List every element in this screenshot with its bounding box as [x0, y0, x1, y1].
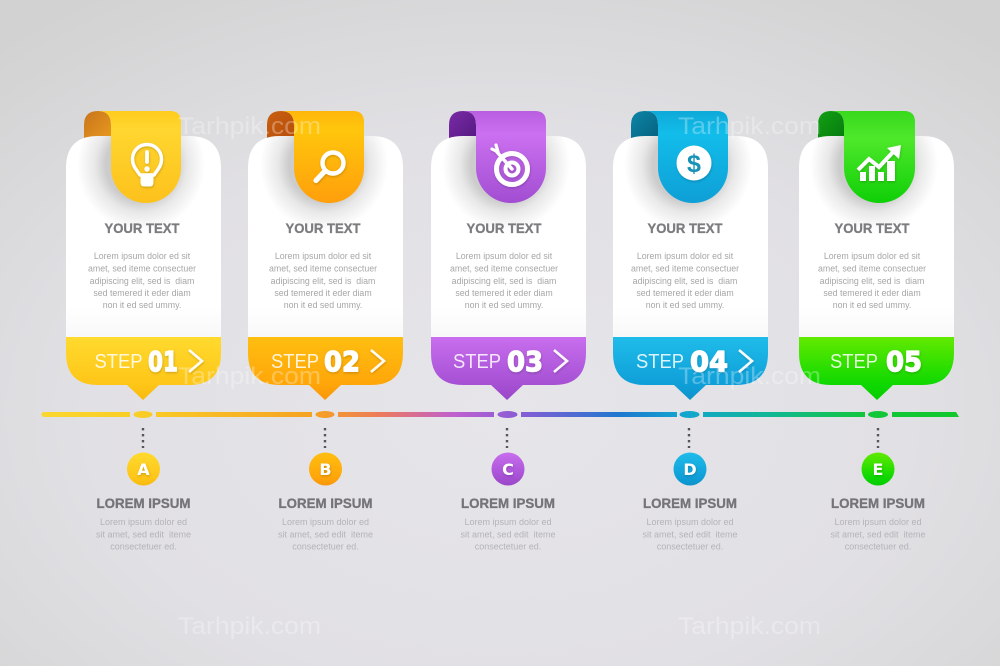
step band — [613, 337, 768, 400]
watermarks: Tarhpik.com — [678, 613, 821, 640]
description — [269, 251, 377, 310]
description: Lorem ipsum dolor ed — [100, 517, 187, 527]
ribbon shadow — [266, 136, 382, 224]
description: sed temered it eder diam — [823, 288, 921, 298]
description: sed temered it eder diam — [636, 288, 734, 298]
step label: STEP — [453, 350, 501, 373]
description: adipiscing elit, sed is diam — [271, 276, 375, 286]
ribbon — [463, 111, 546, 203]
step label — [830, 345, 922, 378]
badge D: D — [683, 460, 697, 479]
badge E: E — [873, 460, 883, 479]
description: sed temered it eder diam — [455, 288, 553, 298]
description: non it ed sed ummy. — [103, 300, 181, 310]
description: non it ed sed ummy. — [284, 300, 362, 310]
step label: 05 — [886, 345, 922, 378]
description: Lorem ipsum dolor ed sit — [824, 251, 921, 261]
description: Lorem ipsum dolor ed sit — [637, 251, 734, 261]
description: adipiscing elit, sed is diam — [820, 276, 924, 286]
description: Lorem ipsum dolor ed — [646, 517, 734, 527]
card body — [431, 136, 586, 337]
description: sit amet, sed edit iteme — [460, 530, 556, 540]
arrow — [554, 350, 567, 372]
connector — [506, 428, 508, 448]
description: adipiscing elit, sed is diam — [90, 276, 194, 286]
description — [460, 517, 556, 552]
milestone C — [460, 428, 556, 552]
arrow — [189, 350, 202, 372]
panel: step 02 — [248, 99, 403, 400]
description: non it ed sed ummy. — [833, 300, 911, 310]
connector — [324, 428, 326, 448]
step label — [94, 345, 178, 378]
step label — [271, 345, 360, 378]
step band — [66, 337, 221, 400]
step band — [431, 337, 586, 400]
step label — [636, 345, 728, 378]
description: sed temered it eder diam — [274, 288, 372, 298]
description: Lorem ipsum dolor ed sit — [275, 251, 372, 261]
connector — [688, 428, 690, 448]
icon: growth chart — [858, 145, 901, 181]
watermarks: Tarhpik.com — [178, 113, 321, 140]
description: Lorem ipsum dolor ed — [834, 517, 922, 527]
step label: STEP — [830, 350, 878, 373]
description: Lorem ipsum dolor ed — [282, 517, 369, 527]
description: sit amet, sed edit iteme — [278, 530, 373, 540]
connector — [877, 428, 879, 448]
step label — [453, 345, 543, 378]
description — [88, 251, 196, 310]
watermarks: Tarhpik.com — [678, 363, 821, 390]
description — [450, 251, 558, 310]
card body — [66, 136, 221, 337]
step label: 02 — [324, 345, 360, 378]
badge B: B — [319, 460, 332, 479]
ribbon shadow — [84, 136, 198, 224]
panel: step 03 — [431, 99, 586, 400]
ribbon back fold — [267, 111, 294, 140]
icon: dollar coin — [676, 146, 712, 180]
heading: LOREM IPSUM — [96, 496, 190, 511]
description: adipiscing elit, sed is diam — [633, 276, 737, 286]
description: consectetuer ed. — [110, 542, 177, 552]
milestone B — [278, 428, 373, 552]
description: sit amet, sed edit iteme — [642, 530, 738, 540]
ribbon — [645, 111, 728, 203]
description: consectetuer ed. — [292, 542, 359, 552]
panel: step 01 — [66, 99, 221, 400]
step band — [248, 337, 403, 400]
heading: YOUR TEXT — [834, 221, 910, 236]
badge C: C — [502, 460, 514, 479]
heading: YOUR TEXT — [286, 221, 361, 236]
description: consectetuer ed. — [845, 542, 911, 552]
description: amet, sed iteme consectuer — [450, 264, 558, 274]
description — [818, 251, 926, 310]
description: sit amet, sed edit iteme — [830, 530, 926, 540]
heading: YOUR TEXT — [648, 221, 723, 236]
step label: STEP — [636, 350, 684, 373]
timeline — [41, 411, 959, 418]
panel: step 05 — [799, 99, 954, 400]
heading: LOREM IPSUM — [278, 496, 372, 511]
description: sit amet, sed edit iteme — [96, 530, 191, 540]
arrow — [739, 350, 752, 372]
step label: STEP — [271, 350, 319, 373]
step label: STEP — [94, 350, 142, 373]
ribbon back fold — [84, 111, 111, 140]
badge A: A — [137, 460, 150, 479]
description: Lorem ipsum dolor ed sit — [94, 251, 191, 261]
description: sed temered it eder diam — [93, 288, 191, 298]
connector — [142, 428, 144, 448]
ribbon back fold — [631, 111, 658, 140]
heading: LOREM IPSUM — [461, 496, 555, 511]
description: amet, sed iteme consectuer — [818, 264, 926, 274]
ribbon back fold — [818, 111, 844, 140]
description: amet, sed iteme consectuer — [269, 264, 377, 274]
description: Lorem ipsum dolor ed — [464, 517, 552, 527]
description — [830, 517, 926, 552]
watermarks — [178, 113, 821, 640]
description: consectetuer ed. — [657, 542, 723, 552]
heading: LOREM IPSUM — [643, 496, 737, 511]
description: consectetuer ed. — [475, 542, 541, 552]
ribbon — [281, 111, 364, 203]
watermarks: Tarhpik.com — [178, 363, 321, 390]
icon: magnifier — [316, 152, 344, 180]
arrow — [371, 350, 384, 372]
description — [642, 517, 738, 552]
step band — [799, 337, 954, 400]
ribbon — [831, 111, 915, 203]
description: Lorem ipsum dolor ed sit — [456, 251, 553, 261]
icon: light bulb — [132, 144, 162, 186]
ribbon shadow — [448, 136, 564, 224]
description — [96, 517, 191, 552]
panel: step 04 — [613, 99, 768, 400]
milestone A — [96, 428, 191, 552]
description: amet, sed iteme consectuer — [88, 264, 196, 274]
watermarks: Tarhpik.com — [678, 113, 821, 140]
card body — [613, 136, 768, 337]
milestone D — [642, 428, 738, 552]
description: adipiscing elit, sed is diam — [452, 276, 556, 286]
ribbon — [98, 111, 181, 203]
heading: LOREM IPSUM — [831, 496, 925, 511]
description — [278, 517, 373, 552]
step label: 04 — [690, 345, 728, 378]
heading: YOUR TEXT — [104, 221, 180, 236]
card body — [799, 136, 954, 337]
description: non it ed sed ummy. — [465, 300, 543, 310]
card body — [248, 136, 403, 337]
ribbon shadow — [816, 136, 932, 224]
ribbon shadow — [630, 136, 746, 224]
milestone E — [830, 428, 926, 552]
description: non it ed sed ummy. — [646, 300, 724, 310]
step label: 01 — [148, 345, 178, 378]
description: amet, sed iteme consectuer — [631, 264, 739, 274]
icon: target — [492, 145, 528, 184]
icon: dollar coin: $ — [687, 150, 701, 178]
watermarks: Tarhpik.com — [178, 613, 321, 640]
step label: 03 — [507, 345, 543, 378]
ribbon back fold — [449, 111, 476, 140]
heading: YOUR TEXT — [466, 221, 542, 236]
description — [631, 251, 739, 310]
